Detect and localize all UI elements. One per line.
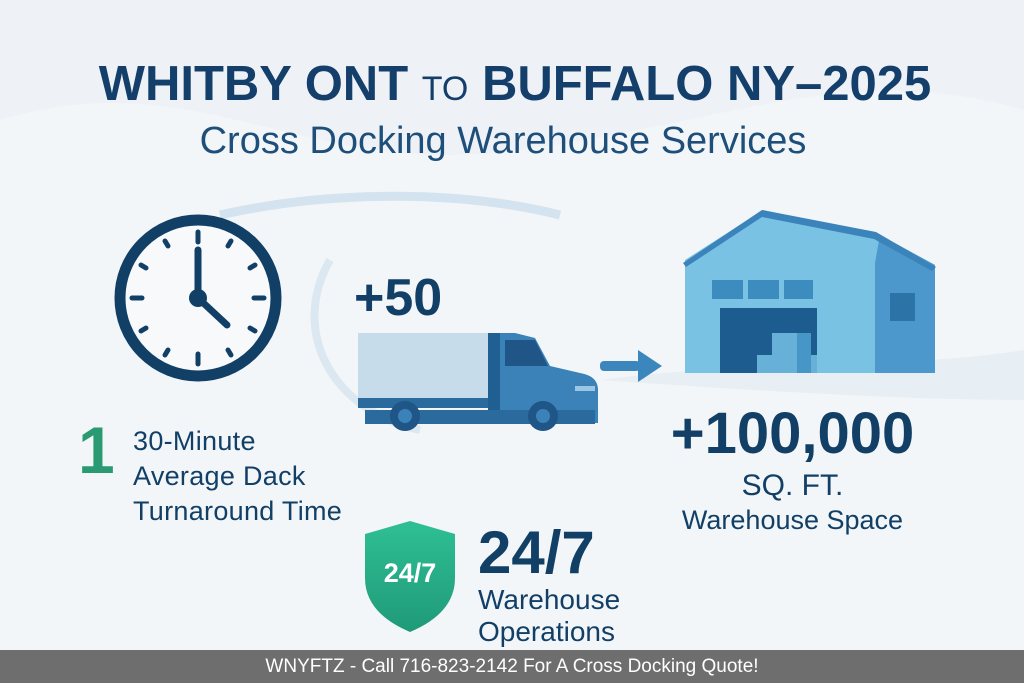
icon: warehouse — [683, 210, 936, 373]
icon: 24/7 shield — [365, 521, 455, 632]
stat: 24/7 operations: Operations — [478, 616, 615, 647]
stat: dock turnaround: Turnaround Time — [133, 496, 342, 526]
stat: +50: +50 — [354, 269, 442, 327]
footer bar — [0, 650, 1024, 683]
stat: dock turnaround — [78, 413, 342, 526]
arrow — [600, 350, 662, 382]
stat: warehouse space — [671, 401, 914, 535]
stat: warehouse space: Warehouse Space — [682, 505, 903, 535]
stat: 24/7 operations — [478, 519, 620, 647]
icon: clock — [114, 214, 282, 382]
stat: warehouse space: +100,000 — [671, 401, 914, 466]
stat: dock turnaround: Average Dack — [133, 461, 306, 491]
stat: 24/7 operations: 24/7 — [478, 519, 595, 586]
stat: dock turnaround: 30-Minute — [133, 426, 256, 456]
subtitle: Cross Docking Warehouse Services — [200, 120, 806, 162]
stat: 24/7 operations: Warehouse — [478, 584, 620, 615]
icon: truck — [358, 333, 598, 431]
stat: dock turnaround: 1 — [78, 413, 115, 487]
footer bar: WNYFTZ - Call 716-823-2142 For A Cross Docking Quote! — [265, 656, 759, 677]
title: WHITBY ONT TO BUFFALO NY–2025 — [99, 57, 931, 111]
stat: warehouse space: SQ. FT. — [742, 469, 843, 502]
icon: 24/7 shield: 24/7 — [384, 558, 436, 588]
